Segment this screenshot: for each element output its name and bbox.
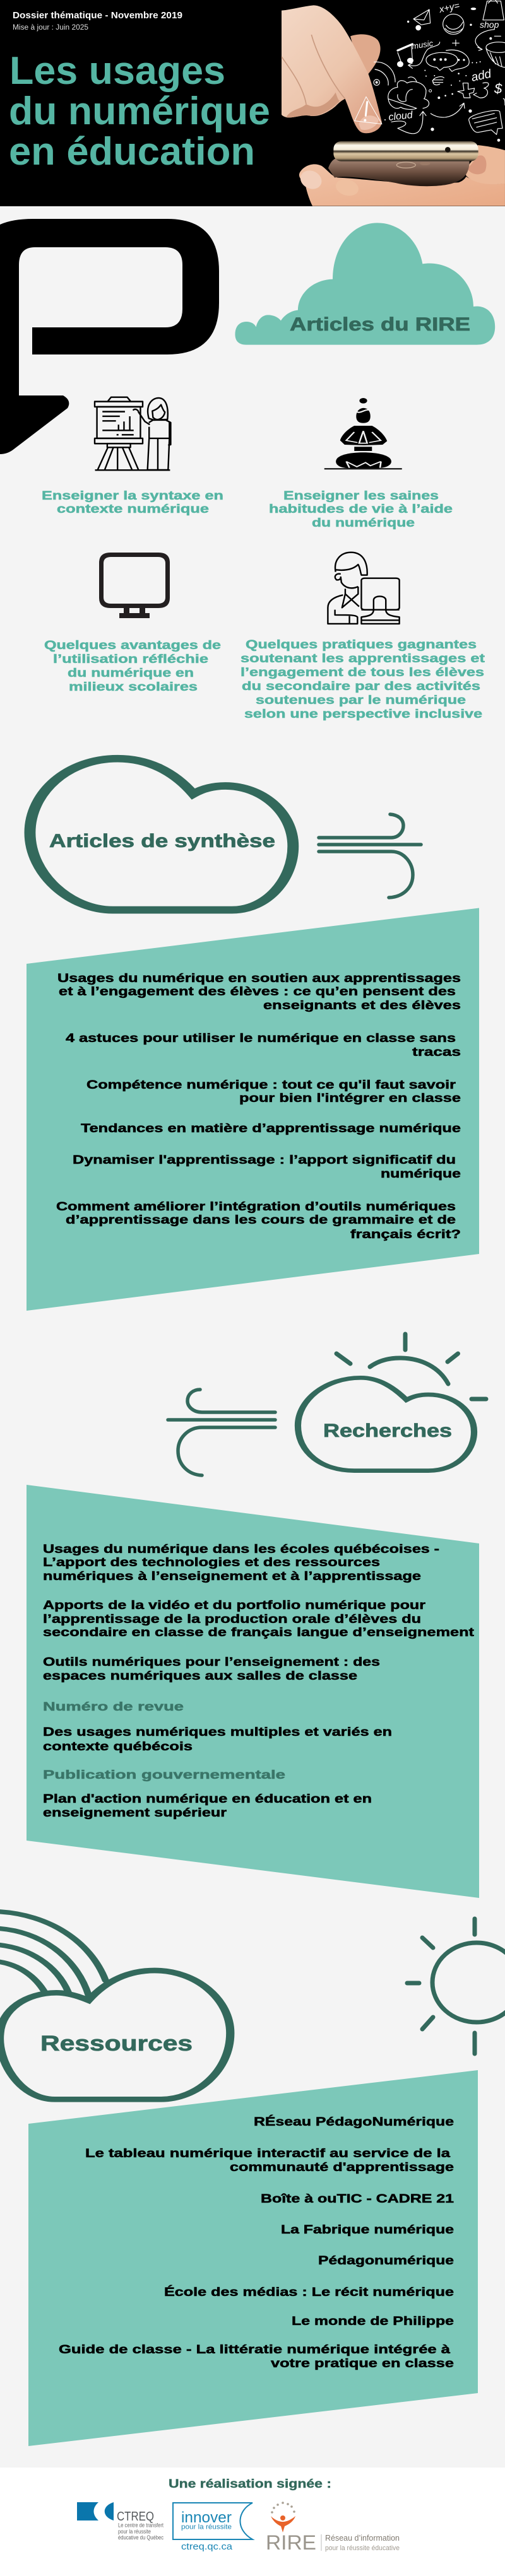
article links: français écrit? — [350, 1228, 461, 1241]
research links: numériques à l’enseignement et à l’apprentissage — [43, 1570, 421, 1583]
text: Quelques pratiques gagnantes — [241, 638, 485, 721]
subheading: Numéro de revue: Numéro de revue — [43, 1701, 184, 1714]
text: Quelques pratiques gagnantes: l’engagement de tous les élèves — [241, 666, 484, 679]
text: Enseigner les saines habitudes: habitudes de vie à l’aide — [269, 503, 453, 516]
government links: enseignement supérieur — [43, 1806, 227, 1820]
heading: Articles de synthèse — [49, 831, 275, 852]
cloud outline — [30, 759, 293, 910]
icon: wind — [168, 1390, 275, 1475]
government links: Plan d'action numérique en éducation et en — [43, 1793, 372, 1806]
logo: CTREQ: pour la réussite — [118, 2528, 151, 2534]
heading: Articles du RIRE — [290, 314, 470, 335]
photo: hand and phone with doodles — [282, 0, 505, 206]
logo: innover pour la réussite: ctreq.qc.ca — [181, 2541, 233, 2552]
cloud outline — [298, 1378, 474, 1471]
research links: espaces numériques aux salles de classe — [43, 1670, 357, 1683]
text: Enseigner les saines habitudes: du numérique — [312, 517, 415, 530]
resource links: communauté d'apprentissage — [230, 2161, 454, 2174]
section heading: Articles de synthèse — [30, 759, 421, 910]
logo: innover pour la réussite: innover — [181, 2509, 232, 2526]
resource links: RÉseau PédagoNumérique — [254, 2115, 454, 2129]
article links: enseignants et des élèves — [263, 999, 461, 1012]
photo: hand and phone with doodles: add — [470, 67, 493, 85]
research links: Apports de la vidéo et du portfolio numérique pour — [43, 1599, 426, 1612]
text: Enseigner la syntaxe — [42, 489, 223, 516]
logo: CTREQ: Le centre de transfert — [118, 2522, 163, 2528]
logo: RIRE: Réseau d’information — [325, 2533, 400, 2543]
text: Quelques pratiques gagnantes: soutenant les apprentissages et — [241, 652, 485, 665]
icon: rainbow arcs — [0, 1912, 105, 1995]
section heading: Ressources — [0, 1912, 505, 2099]
article links: Compétence numérique : tout ce qu'il faut savoir — [86, 1079, 456, 1092]
cloud outline — [0, 1970, 230, 2099]
article links: d’apprentissage dans les cours de grammaire et de — [66, 1214, 456, 1227]
article links: numérique — [381, 1168, 461, 1181]
resource links: votre pratique en classe — [271, 2357, 454, 2370]
text: Quelques pratiques gagnantes: du secondaire par des activités — [242, 680, 480, 693]
icon: wind — [319, 814, 421, 898]
text: Quelques pratiques gagnantes: soutenues par le numérique — [256, 694, 466, 707]
subheading: Publication gouvernementale: Publication gouvernementale — [43, 1769, 285, 1782]
resource links: Le monde de Philippe — [292, 2315, 454, 2328]
article links — [56, 972, 461, 1241]
text: Quelques pratiques gagnantes: Quelques pratiques gagnantes — [246, 638, 477, 652]
panel: recherches list — [27, 1485, 479, 1898]
resource links: Boîte à ouTIC - CADRE 21 — [261, 2193, 454, 2206]
resource links: La Fabrique numérique — [281, 2223, 454, 2237]
journal links: Des usages numériques multiples et variés en — [43, 1726, 392, 1739]
photo: hand and phone with doodles: $ — [494, 81, 502, 97]
logo: CTREQ — [77, 2502, 163, 2541]
logo: RIRE — [266, 2502, 400, 2554]
icon: teacher at board — [95, 397, 170, 470]
government links — [43, 1793, 372, 1820]
icon: meditating figure — [324, 398, 402, 469]
text: Quelques avantages — [44, 639, 221, 694]
photo: hand and phone with doodles: cloud — [388, 110, 414, 123]
text: Quelques pratiques gagnantes: selon une perspective inclusive — [244, 708, 482, 721]
resource links: Le tableau numérique interactif au service de la — [85, 2147, 451, 2160]
icon: sun — [407, 1919, 505, 2054]
resource links — [59, 2115, 454, 2370]
research links: L’apport des technologies et des ressources — [43, 1556, 380, 1569]
article links: 4 astuces pour utiliser le numérique en classe sans — [66, 1032, 456, 1045]
article links: Tendances en matière d’apprentissage numérique — [81, 1122, 461, 1135]
text: Enseigner les saines habitudes: Enseigner les saines — [283, 489, 439, 503]
article links: Usages du numérique en soutien aux apprentissages — [57, 972, 461, 985]
photo: hand and phone with doodles: shop — [480, 20, 499, 30]
update date: Mise à jour : Juin 2025 — [13, 24, 88, 32]
article links: tracas — [412, 1046, 461, 1059]
dossier date: Dossier thématique - Novembre 2019 — [13, 10, 182, 21]
logo: RIRE: pour la réussite éducative — [325, 2544, 400, 2552]
panel: Articles du RIRE cloud — [235, 223, 495, 345]
logo: RIRE: RIRE — [266, 2531, 316, 2554]
article links: Comment améliorer l’intégration d’outils numériques — [56, 1200, 456, 1214]
photo: hand and phone with doodles: x+y= — [437, 0, 461, 15]
resource links: Guide de classe - La littératie numérique intégrée à — [59, 2343, 451, 2356]
icon: monitor — [99, 553, 170, 618]
section heading: Recherches — [168, 1334, 486, 1475]
heading: Ressources — [40, 2032, 193, 2056]
text: Quelques avantages: l’utilisation réfléchie — [53, 653, 208, 666]
research links: l’apprentissage de la production orale d’élèves du — [43, 1613, 421, 1626]
text: Quelques avantages: Quelques avantages de — [44, 639, 221, 652]
text: Enseigner la syntaxe: contexte numérique — [57, 503, 209, 516]
text: Quelques avantages: milieux scolaires — [69, 681, 198, 694]
icon: black speech bubble outline — [0, 219, 219, 454]
research links: secondaire en classe de français langue d’enseignement — [43, 1626, 475, 1639]
research links — [43, 1543, 475, 1683]
title: en éducation — [9, 130, 255, 173]
journal links: contexte québécois — [43, 1740, 193, 1753]
resource links: Pédagonumérique — [318, 2254, 454, 2268]
icon: sun behind cloud — [336, 1334, 486, 1399]
article links: Dynamiser l'apprentissage : l’apport significatif du — [73, 1154, 456, 1167]
icon: person at computer — [328, 553, 400, 624]
article links: et à l’engagement des élèves : ce qu’en pensent des — [59, 985, 456, 998]
research links: Outils numériques pour l’enseignement : des — [43, 1656, 380, 1669]
logo: innover pour la réussite — [173, 2503, 252, 2552]
footer — [0, 2468, 505, 2576]
heading: Recherches — [323, 1420, 452, 1441]
article links: pour bien l'intégrer en classe — [239, 1092, 461, 1105]
logo: innover pour la réussite: pour la réussite — [181, 2523, 232, 2531]
credit line: Une réalisation signée : — [169, 2478, 331, 2491]
title: Les usages — [9, 49, 225, 93]
text: Enseigner la syntaxe: Enseigner la syntaxe en — [42, 489, 223, 503]
logo: CTREQ: éducative du Québec — [118, 2534, 163, 2541]
header banner — [0, 0, 505, 206]
title — [9, 49, 270, 173]
journal links — [43, 1726, 392, 1753]
logo: CTREQ: CTREQ — [117, 2510, 154, 2524]
teal cloud — [235, 223, 495, 345]
resource links: École des médias : Le récit numérique — [164, 2285, 454, 2299]
panel: ressources list — [28, 2070, 478, 2446]
photo: hand and phone with doodles: music — [411, 38, 434, 51]
title: du numérique — [9, 90, 270, 133]
text: Enseigner les saines habitudes — [269, 489, 453, 530]
research links: Usages du numérique dans les écoles québécoises - — [43, 1543, 439, 1556]
text: Quelques avantages: du numérique en — [68, 667, 194, 680]
panel: articles de synthèse list — [27, 908, 479, 1311]
